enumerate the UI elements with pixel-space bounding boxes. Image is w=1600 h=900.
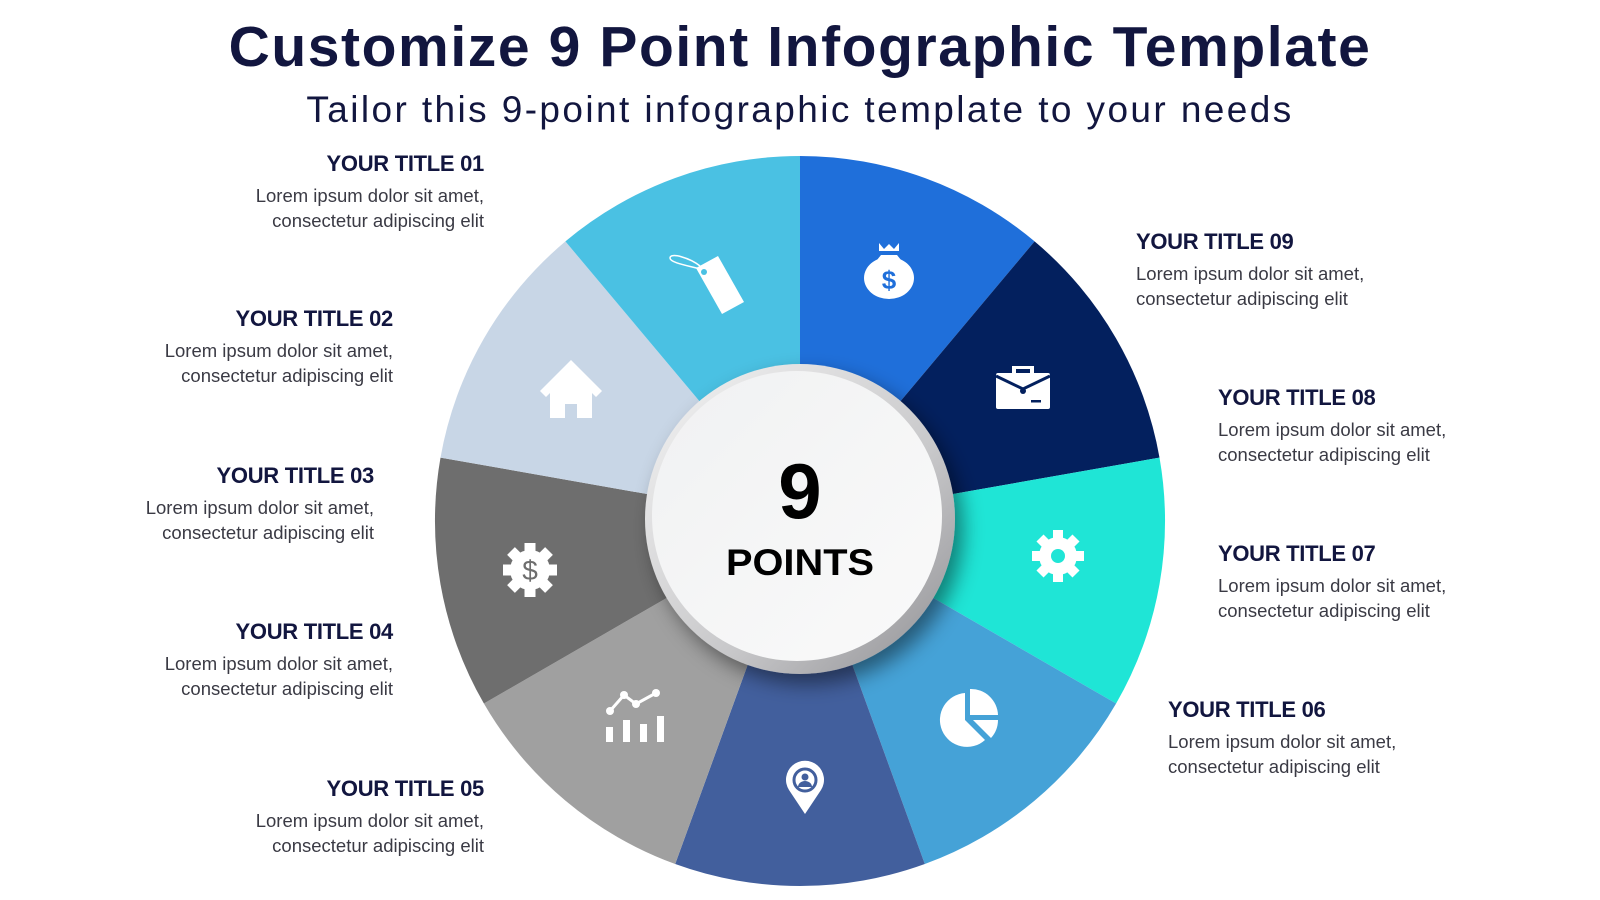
- icon: briefcase: [996, 366, 1050, 409]
- segment 4 pie: [800, 521, 1116, 864]
- text: title 05: [256, 776, 484, 856]
- subtitle: Tailor this 9-point infographic template to your needs: [306, 89, 1294, 130]
- text: title 06: YOUR TITLE 06: [1168, 697, 1325, 722]
- text: title 07: YOUR TITLE 07: [1218, 541, 1375, 566]
- segment 6 chart: [484, 521, 800, 864]
- text: title 07: Lorem ipsum dolor sit amet,: [1218, 575, 1446, 596]
- text: title 04: consectetur adipiscing elit: [181, 678, 393, 699]
- center circle: [645, 364, 955, 674]
- text: title 03: consectetur adipiscing elit: [162, 522, 374, 543]
- text: title 02: Lorem ipsum dolor sit amet,: [165, 340, 393, 361]
- text: title 09: YOUR TITLE 09: [1136, 229, 1293, 254]
- text: title 08: consectetur adipiscing elit: [1218, 444, 1430, 465]
- text: title 02: consectetur adipiscing elit: [181, 365, 393, 386]
- segment 5 pin: [675, 521, 925, 886]
- text: title 07: [1218, 541, 1446, 621]
- segment 3 gear: [800, 458, 1165, 704]
- text: title 07: consectetur adipiscing elit: [1218, 600, 1430, 621]
- icon: line bar chart: [606, 689, 664, 742]
- segment 9 tag: [565, 156, 800, 521]
- icon: dollar gear: $: [522, 555, 538, 586]
- text: title 05: consectetur adipiscing elit: [272, 835, 484, 856]
- text: title 04: YOUR TITLE 04: [236, 619, 393, 644]
- text: title 06: Lorem ipsum dolor sit amet,: [1168, 731, 1396, 752]
- segment 2 briefcase: [800, 241, 1160, 521]
- icon: money bag: $: [882, 265, 897, 295]
- icon: dollar gear: [503, 543, 557, 597]
- segment 8 home: [440, 241, 800, 521]
- text: title 01: consectetur adipiscing elit: [272, 210, 484, 231]
- text: title 01: [256, 151, 484, 231]
- text: title 08: Lorem ipsum dolor sit amet,: [1218, 419, 1446, 440]
- segment 1 money: [800, 156, 1035, 521]
- text: title 05: Lorem ipsum dolor sit amet,: [256, 810, 484, 831]
- text: title 05: YOUR TITLE 05: [327, 776, 484, 801]
- text: title 04: Lorem ipsum dolor sit amet,: [165, 653, 393, 674]
- icon: pie chart: [940, 689, 998, 747]
- text: title 06: consectetur adipiscing elit: [1168, 756, 1380, 777]
- text: title 09: Lorem ipsum dolor sit amet,: [1136, 263, 1364, 284]
- icon: location pin: [786, 761, 824, 814]
- text: title 09: consectetur adipiscing elit: [1136, 288, 1348, 309]
- text: title 08: YOUR TITLE 08: [1218, 385, 1375, 410]
- text: title 09: [1136, 229, 1364, 309]
- icon: tag: [670, 256, 744, 314]
- icon: home: [540, 360, 602, 418]
- center number: 9: [778, 447, 822, 535]
- title: Customize 9 Point Infographic Template: [229, 15, 1371, 79]
- text: title 04: [165, 619, 394, 699]
- text: title 01: YOUR TITLE 01: [327, 151, 484, 176]
- text: title 02: YOUR TITLE 02: [236, 306, 393, 331]
- segment 7 dollar gear: [435, 458, 800, 704]
- icon: gear: [1032, 530, 1084, 582]
- text: title 01: Lorem ipsum dolor sit amet,: [256, 185, 484, 206]
- text: title 02: [165, 306, 393, 386]
- text: title 06: [1168, 697, 1396, 777]
- text: title 08: [1218, 385, 1446, 465]
- text: title 03: YOUR TITLE 03: [217, 463, 374, 488]
- text: title 03: [146, 463, 374, 543]
- text: title 03: Lorem ipsum dolor sit amet,: [146, 497, 374, 518]
- center label: POINTS: [726, 542, 874, 583]
- icon: money bag: [864, 243, 914, 299]
